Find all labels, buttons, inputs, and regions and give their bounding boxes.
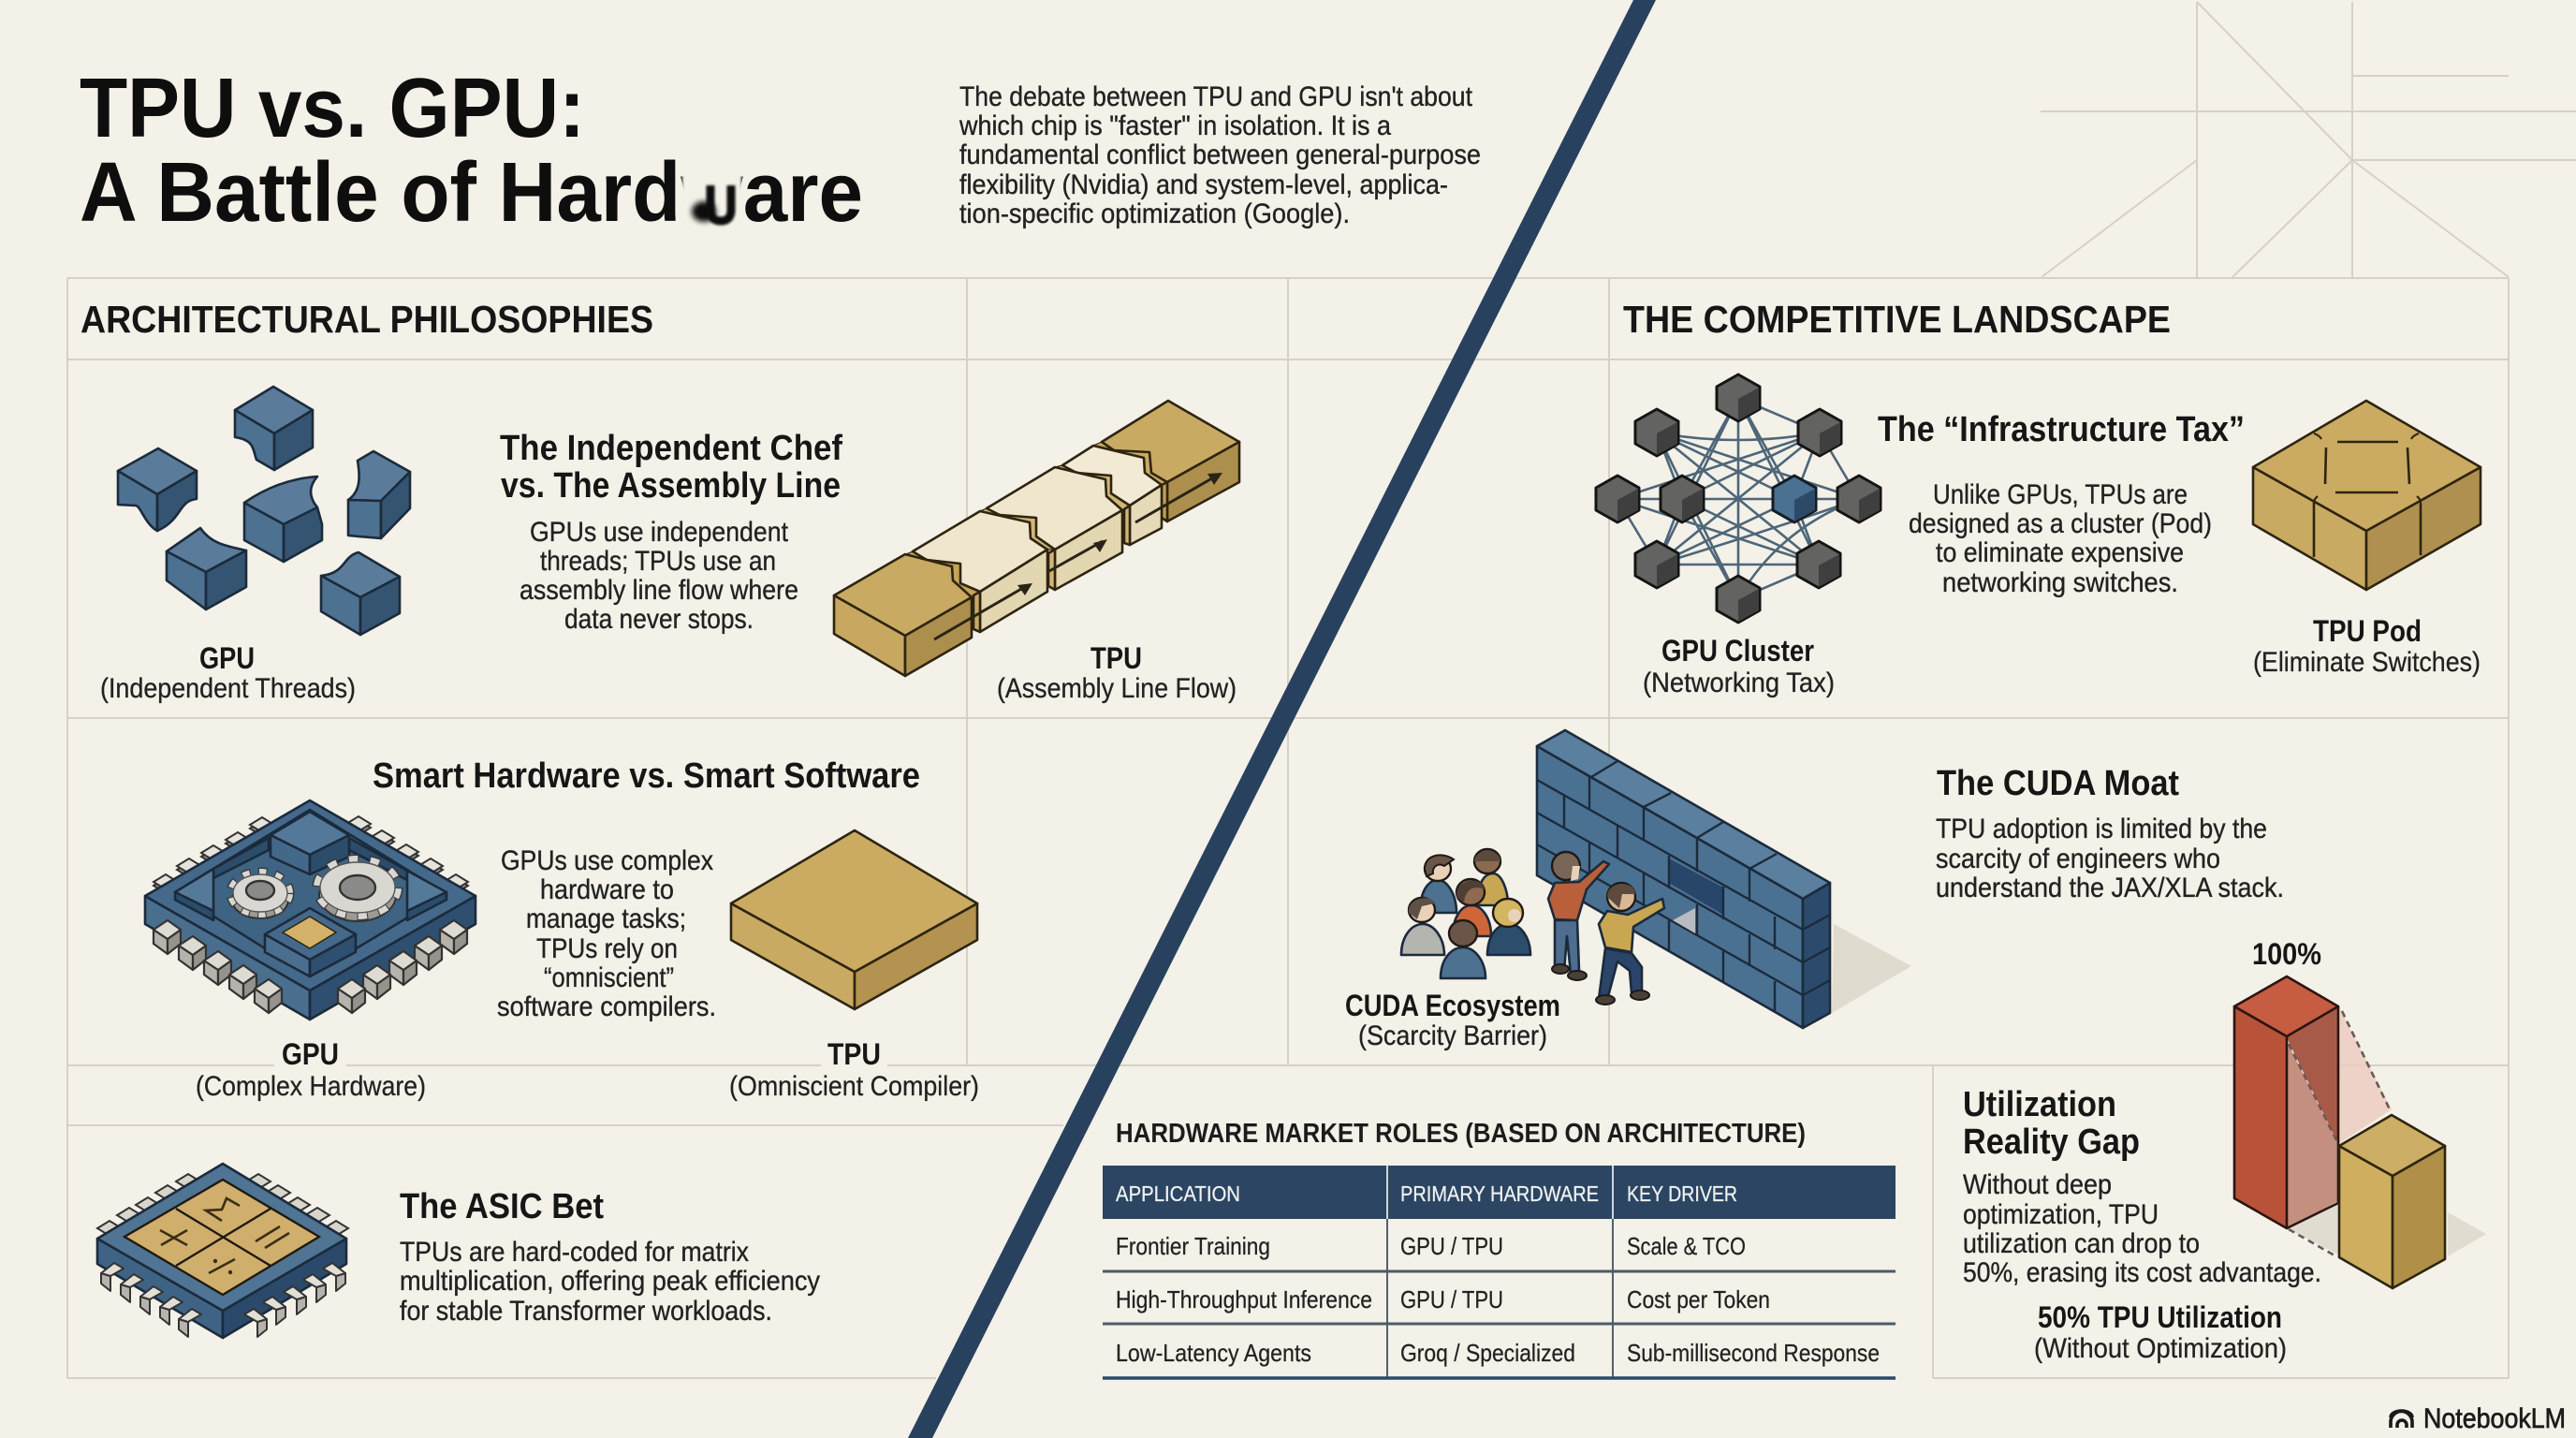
TPU caption: [997, 641, 1237, 704]
TPU caption: (Assembly Line Flow): [997, 673, 1237, 704]
text: the CUDA moat: scarcity of engineers who: [1936, 844, 2220, 874]
table body rows: Low-Latency Agents: [1116, 1339, 1311, 1367]
table body rows: [1103, 1219, 1895, 1378]
text: hardware vs software: TPUs rely on: [536, 933, 678, 964]
panel: architectural philosophies: [80, 298, 1239, 1338]
text: the CUDA moat: understand the JAX/XLA stack.: [1936, 873, 2284, 903]
50 percent TPU utilization caption: [2034, 1300, 2287, 1364]
table body rows: High-Throughput Inference: [1116, 1285, 1372, 1313]
TPU caption: TPU: [1090, 641, 1142, 675]
GPU caption: GPU: [199, 641, 255, 675]
diagonal divider: [908, 0, 1656, 1438]
icon: waiting engineers group: [1401, 849, 1530, 978]
intro paragraph: fundamental conflict between general-purpose: [959, 139, 1481, 170]
chart: utilization bars: [2234, 937, 2486, 1288]
heading and text: independent chef vs assembly line: The Independent Chef: [500, 429, 842, 468]
title: [80, 62, 863, 240]
text: utilization reality gap: Without deep: [1963, 1169, 2112, 1200]
icon: TPU pod: [2253, 401, 2481, 590]
heading and text: independent chef vs assembly line: data never stops.: [564, 604, 754, 635]
text: hardware vs software: hardware to: [540, 874, 674, 905]
GPU caption: (Independent Threads): [100, 673, 356, 704]
heading and text: independent chef vs assembly line: GPUs use independent: [530, 517, 789, 548]
section heading: competitive landscape: THE COMPETITIVE LANDSCAPE: [1623, 298, 2171, 341]
heading and text: independent chef vs assembly line: [500, 429, 842, 635]
text: the CUDA moat: TPU adoption is limited by the: [1936, 814, 2267, 844]
heading and text: independent chef vs assembly line: assembly line flow where: [520, 575, 798, 606]
table header row: APPLICATION: [1116, 1181, 1240, 1206]
icon: CUDA brick wall: [1537, 730, 1911, 1028]
table body rows: Cost per Token: [1627, 1285, 1770, 1313]
bar: 50 percent TPU utilization: [2339, 1115, 2445, 1288]
intro paragraph: The debate between TPU and GPU isn't about: [959, 81, 1473, 112]
heading and text: independent chef vs assembly line: threads; TPUs use an: [540, 546, 776, 577]
CUDA ecosystem caption: (Scarcity Barrier): [1358, 1020, 1547, 1051]
icon: GPU complex chip with gears: [145, 800, 476, 1020]
TPU pod caption: [2253, 614, 2481, 678]
text: the infrastructure tax: [1878, 410, 2245, 598]
intro paragraph: flexibility (Nvidia) and system-level, applica-: [959, 169, 1448, 200]
text: the infrastructure tax: to eliminate expensive: [1936, 537, 2184, 568]
text: the ASIC bet: [400, 1187, 820, 1327]
bar: shadows: [2287, 1203, 2486, 1256]
table body rows: Frontier Training: [1116, 1232, 1270, 1260]
text: the infrastructure tax: networking switches.: [1942, 567, 2178, 598]
GPU caption: [100, 641, 356, 704]
text: utilization reality gap: 50%, erasing its cost advantage.: [1963, 1257, 2321, 1288]
text: the ASIC bet: multiplication, offering peak efficiency: [400, 1266, 820, 1297]
text: the ASIC bet: The ASIC Bet: [400, 1187, 604, 1226]
icon: GPU cluster network: [1596, 374, 1881, 623]
text: the ASIC bet: TPUs are hard-coded for matrix: [400, 1237, 749, 1268]
text: utilization reality gap: optimization, TPU: [1963, 1199, 2159, 1230]
CUDA ecosystem caption: [1345, 989, 1560, 1051]
TPU pod caption: (Eliminate Switches): [2253, 647, 2481, 678]
text: the infrastructure tax: designed as a cluster (Pod): [1909, 508, 2212, 539]
intro paragraph: [959, 81, 1481, 229]
text: hardware vs software: [497, 845, 716, 1022]
GPU cluster caption: [1643, 634, 1835, 698]
table body rows: Groq / Specialized: [1400, 1339, 1575, 1367]
text: hardware vs software: software compilers.: [497, 991, 716, 1022]
TPU omniscient compiler caption: TPU: [827, 1037, 881, 1071]
panel: hardware market roles table: [1103, 1119, 1895, 1378]
text: utilization reality gap: utilization can drop to: [1963, 1228, 2200, 1259]
table header row: PRIMARY HARDWARE: [1400, 1181, 1599, 1206]
section heading: architectural philosophies: ARCHITECTURAL PHILOSOPHIES: [80, 298, 653, 341]
table title: HARDWARE MARKET ROLES (BASED ON ARCHITECTURE): [1116, 1119, 1806, 1149]
icon: TPU flat slab: [731, 830, 977, 1009]
text: the CUDA moat: The CUDA Moat: [1937, 764, 2179, 803]
text: hardware vs software: manage tasks;: [526, 903, 686, 934]
GPU complex hardware caption: [196, 1037, 426, 1102]
label: 100 percent: 100%: [2252, 937, 2321, 971]
CUDA ecosystem caption: CUDA Ecosystem: [1345, 989, 1560, 1022]
text: utilization reality gap: Utilization: [1963, 1085, 2116, 1124]
bar: optimized 100 percent: [2234, 976, 2392, 1255]
GPU complex hardware caption: GPU: [282, 1037, 339, 1071]
text: hardware vs software: “omniscient”: [544, 962, 674, 993]
table header row: KEY DRIVER: [1627, 1181, 1737, 1206]
50 percent TPU utilization caption: 50% TPU Utilization: [2038, 1300, 2282, 1334]
title: A Battle of Hardware: [80, 146, 863, 240]
50 percent TPU utilization caption: (Without Optimization): [2034, 1333, 2287, 1364]
intro paragraph: which chip is "faster" in isolation. It is a: [959, 110, 1391, 141]
table body rows: Sub-millisecond Response: [1627, 1339, 1880, 1367]
table body rows: Scale & TCO: [1627, 1232, 1746, 1260]
TPU omniscient compiler caption: [729, 1037, 979, 1102]
icon: engineers at the wall: [1548, 852, 1664, 1005]
heading: smart hardware vs smart software: Smart Hardware vs. Smart Software: [373, 756, 920, 796]
icon: TPU assembly line blocks: [834, 401, 1239, 676]
TPU pod caption: TPU Pod: [2313, 614, 2422, 648]
text: utilization reality gap: [1963, 1085, 2321, 1288]
icon: GPU independent thread blocks: [118, 387, 410, 635]
GPU cluster caption: (Networking Tax): [1643, 668, 1835, 698]
GPU complex hardware caption: (Complex Hardware): [196, 1071, 426, 1102]
text: hardware vs software: GPUs use complex: [501, 845, 713, 876]
text: utilization reality gap: Reality Gap: [1963, 1123, 2140, 1162]
table header row: [1103, 1166, 1895, 1219]
panel: competitive landscape: [1345, 298, 2486, 1364]
text: the ASIC bet: for stable Transformer workloads.: [400, 1296, 772, 1327]
title: TPU vs. GPU:: [80, 62, 585, 155]
intro paragraph: tion-specific optimization (Google).: [959, 198, 1350, 229]
table body rows: GPU / TPU: [1400, 1232, 1503, 1260]
text: the infrastructure tax: Unlike GPUs, TPUs are: [1933, 479, 2188, 510]
text: the CUDA moat: [1936, 764, 2284, 903]
table body rows: GPU / TPU: [1400, 1285, 1503, 1313]
GPU cluster caption: GPU Cluster: [1661, 634, 1814, 668]
TPU omniscient compiler caption: (Omniscient Compiler): [729, 1071, 979, 1102]
heading and text: independent chef vs assembly line: vs. The Assembly Line: [501, 466, 841, 506]
text: the infrastructure tax: The “Infrastructure Tax”: [1878, 410, 2245, 449]
icon: ASIC chip with math symbols: [97, 1164, 348, 1338]
